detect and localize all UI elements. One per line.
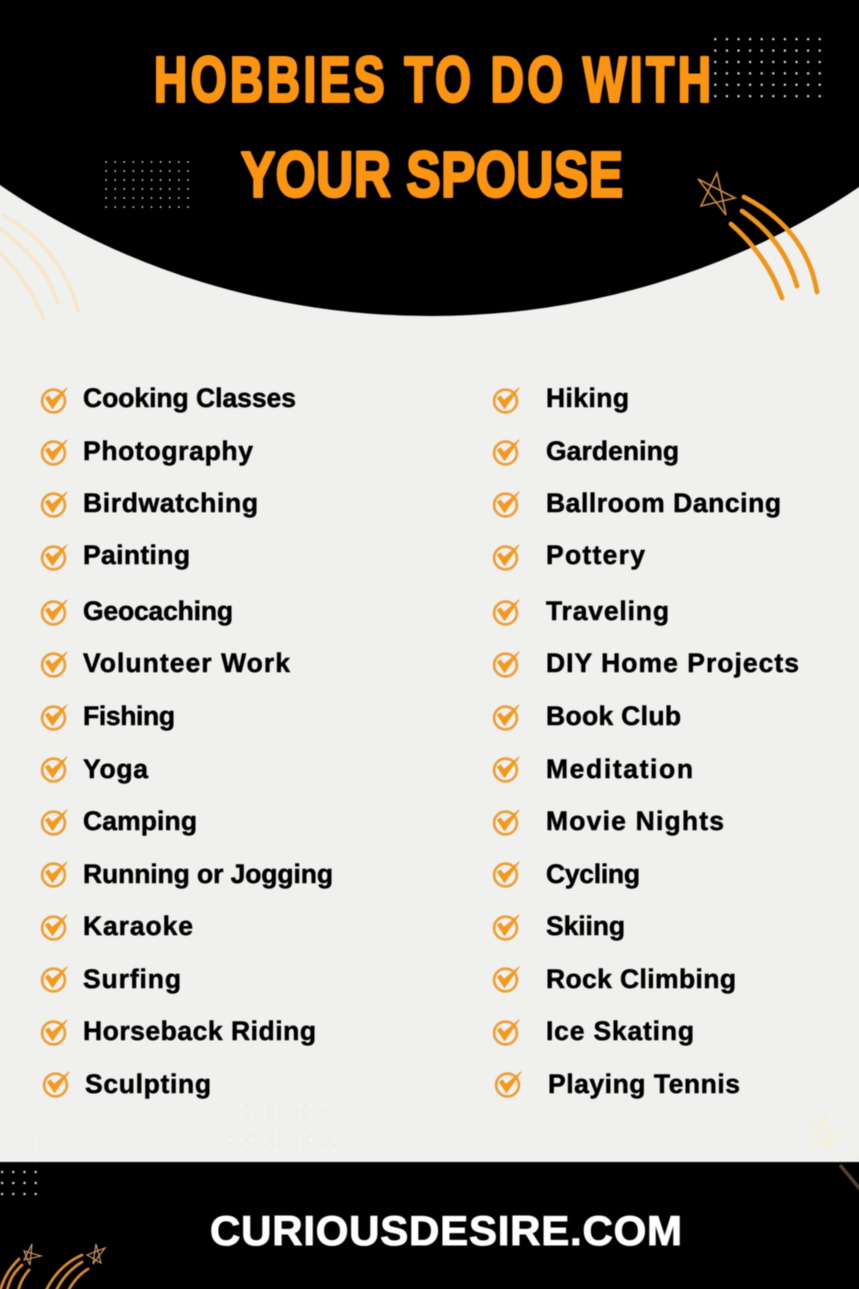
footer website text: CURIOUSDESIRE.COM bbox=[210, 1207, 682, 1254]
checklist right column: Meditation bbox=[546, 754, 693, 784]
checklist left column: Birdwatching bbox=[83, 488, 258, 518]
black header curve bbox=[0, 0, 859, 316]
dot pattern top right bbox=[710, 34, 826, 102]
checklist right column: Playing Tennis bbox=[548, 1069, 740, 1099]
title bbox=[154, 44, 711, 211]
checklist left column: Fishing bbox=[83, 701, 175, 731]
checklist right column: Rock Climbing bbox=[546, 964, 736, 994]
checklist right column: Hiking bbox=[546, 383, 629, 413]
faint dots above footer bbox=[0, 1100, 340, 1164]
checklist left column: Volunteer Work bbox=[83, 648, 290, 678]
faint arc footer right bbox=[840, 1165, 859, 1195]
dot pattern header left bbox=[102, 158, 192, 212]
checklist left column: Cooking Classes bbox=[83, 383, 296, 413]
faint star bottom right bbox=[808, 1115, 859, 1163]
icon: shooting star top right bbox=[698, 173, 817, 298]
checklist right column: Book Club bbox=[546, 701, 681, 731]
checklist left column bbox=[42, 383, 333, 1099]
checklist right column: Skiing bbox=[546, 911, 625, 941]
checklist left column: Karaoke bbox=[83, 911, 193, 941]
checklist right column: Movie Nights bbox=[546, 806, 724, 836]
checklist left column: Running or Jogging bbox=[83, 859, 333, 889]
checklist right column: Gardening bbox=[546, 436, 679, 466]
faint arcs top left bbox=[0, 216, 78, 318]
black footer bbox=[0, 1162, 859, 1289]
footer dot pattern bbox=[0, 1166, 40, 1200]
checklist right column: Traveling bbox=[546, 596, 669, 626]
title: HOBBIES TO DO WITH bbox=[154, 44, 711, 115]
checklist left column: Geocaching bbox=[83, 596, 233, 626]
checklist right column: Cycling bbox=[546, 859, 640, 889]
checklist right column: DIY Home Projects bbox=[546, 648, 799, 678]
checklist left column: Yoga bbox=[83, 754, 148, 784]
checklist right column: Pottery bbox=[546, 540, 645, 570]
checklist right column bbox=[494, 383, 799, 1099]
checklist right column: Ballroom Dancing bbox=[546, 488, 781, 518]
checklist left column: Painting bbox=[83, 540, 190, 570]
icon: shooting stars footer left bbox=[0, 1244, 105, 1289]
checklist left column: Surfing bbox=[83, 964, 181, 994]
title: YOUR SPOUSE bbox=[241, 140, 623, 211]
checklist right column: Ice Skating bbox=[546, 1016, 694, 1046]
checklist left column: Camping bbox=[83, 806, 197, 836]
checklist left column: Sculpting bbox=[85, 1069, 211, 1099]
checklist left column: Horseback Riding bbox=[83, 1016, 316, 1046]
checklist left column: Photography bbox=[83, 436, 253, 466]
